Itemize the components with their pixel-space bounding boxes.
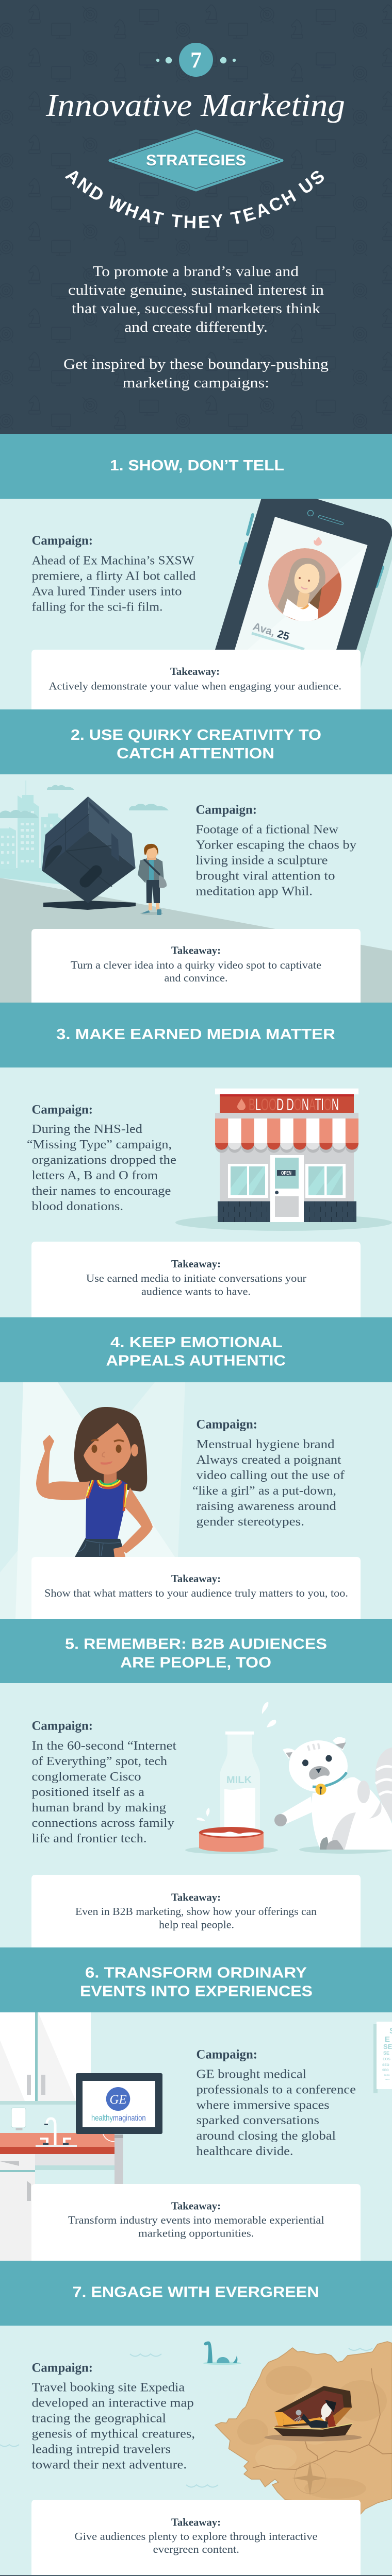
takeaway card: marketing opportunities. (138, 2227, 254, 2240)
panel: section 2 (0, 709, 392, 1003)
illustration: parchment map (215, 2342, 392, 2514)
intro text: marketing campaigns: (123, 375, 269, 391)
intro text: To promote a brand’s value and (93, 263, 299, 280)
campaign text (27, 1103, 176, 1213)
campaign text (32, 1719, 176, 1845)
takeaway card (31, 2184, 361, 2261)
heading 3: 3. MAKE EARNED MEDIA MATTER (56, 1026, 335, 1043)
campaign text: falling for the sci-fi film. (32, 600, 163, 614)
intro text: cultivate genuine, sustained interest in (68, 282, 324, 298)
campaign text: Always created a poignant (196, 1453, 341, 1467)
intro text: that value, successful marketers think (72, 300, 321, 317)
campaign text: “like a girl” as a put-down, (192, 1484, 336, 1498)
takeaway card (31, 1875, 361, 1947)
illustration: eye chart: SE (383, 2050, 389, 2056)
campaign text: around closing the global (196, 2129, 336, 2143)
campaign text: letters A, B and O from (32, 1168, 158, 1182)
takeaway card: help real people. (159, 1918, 234, 1930)
door: OPEN (281, 1171, 291, 1176)
campaign text: GE brought medical (196, 2067, 306, 2081)
badge: number 7 (156, 43, 236, 77)
awning (215, 1118, 358, 1153)
curved subtitle: AND WHAT THEY TEACH US (65, 171, 324, 229)
illustration: eye chart: SEO (382, 2069, 389, 2072)
profile name: Ava, 25 (251, 620, 291, 643)
illustration: medical exam room (0, 2012, 123, 2261)
top (86, 1480, 127, 1539)
campaign text: meditation app Whil. (196, 885, 313, 899)
heading 6: EVENTS INTO EXPERIENCES (80, 1983, 313, 1999)
illustration: milk bottle and bowl: MILK (226, 1775, 252, 1786)
takeaway card: Takeaway: (170, 665, 220, 677)
heading 7: 7. ENGAGE WITH EVERGREEN (73, 2284, 319, 2301)
panel: section 5 (0, 1619, 392, 1947)
campaign text: “Missing Type” campaign, (27, 1138, 172, 1151)
heading 3 (0, 1003, 392, 1067)
takeaway card: Use earned media to initiate conversations your (86, 1272, 306, 1284)
campaign text: premiere, a flirty AI bot called (32, 569, 196, 583)
campaign text: human brand by making (32, 1801, 166, 1815)
campaign text: tracing the geographical (32, 2412, 166, 2426)
campaign text: toward their next adventure. (32, 2458, 187, 2472)
arms (36, 1435, 90, 1500)
heading 5 (0, 1619, 392, 1683)
takeaway card: Even in B2B marketing, show how your offerings can (75, 1905, 317, 1918)
diamond banner: strategies: STRATEGIES (146, 152, 246, 169)
campaign text: Ahead of Ex Machina’s SXSW (32, 554, 194, 568)
vampire (328, 2414, 336, 2428)
campaign text: raising awareness around (196, 1499, 336, 1513)
campaign text: healthcare divide. (196, 2144, 293, 2158)
heading 4: 4. KEEP EMOTIONAL (110, 1334, 283, 1351)
illustration: eye chart: E (385, 2035, 390, 2044)
campaign text: where immersive spaces (196, 2098, 329, 2112)
waves (0, 2348, 372, 2487)
heading 5: 5. REMEMBER: B2B AUDIENCES (65, 1636, 327, 1652)
heading 2 (0, 709, 392, 774)
takeaway card: and convince. (164, 972, 228, 984)
campaign text: Ava lured Tinder users into (32, 585, 182, 599)
campaign text: Footage of a fictional New (196, 823, 338, 837)
panel: section 7 (0, 2261, 392, 2575)
campaign text: video calling out the use of (196, 1468, 345, 1482)
campaign text: Campaign: (196, 1418, 257, 1432)
campaign text (32, 534, 196, 614)
campaign text: conglomerate Cisco (32, 1770, 141, 1784)
sign text: BLOOD DONATION (249, 1095, 339, 1114)
intro text: and create differently. (124, 319, 268, 335)
campaign text: genesis of mythical creatures, (32, 2427, 195, 2441)
panel: section 3 (0, 1003, 392, 1317)
windows (228, 1164, 346, 1198)
takeaway card (31, 1557, 361, 1619)
takeaway card: Takeaway: (171, 944, 221, 957)
campaign text: gender stereotypes. (196, 1515, 304, 1529)
takeaway card: Takeaway: (171, 2199, 221, 2212)
heading 6 (0, 1947, 392, 2012)
illustration: eye chart (373, 2022, 392, 2093)
campaign text (32, 2361, 195, 2472)
takeaway card: Takeaway: (171, 2516, 221, 2528)
campaign text: Campaign: (32, 1719, 93, 1733)
diamond banner: strategies (110, 131, 282, 190)
takeaway card: Actively demonstrate your value when engaging your audience. (48, 680, 341, 692)
takeaway card (31, 650, 361, 709)
campaign text: life and frontier tech. (32, 1832, 146, 1845)
badge: number 7: 7 (190, 47, 202, 73)
illustration: monitor with GE logo: healthymagination (91, 2114, 146, 2123)
door (270, 1155, 304, 1222)
illustration: eye chart: EOS (383, 2058, 390, 2061)
heading 1 (0, 434, 392, 499)
heading 2: CATCH ATTENTION (117, 745, 274, 762)
takeaway card: Turn a clever idea into a quirky video spot to captivate (71, 959, 321, 971)
campaign text: Campaign: (196, 803, 257, 817)
illustration: monitor with GE logo: GE (109, 2093, 127, 2107)
campaign text: their names to encourage (32, 1184, 171, 1198)
takeaway card: Give audiences plenty to explore through interactive (74, 2530, 318, 2543)
campaign text: In the 60-second “Internet (32, 1739, 176, 1753)
campaign text: brought viral attention to (196, 869, 335, 883)
diamond banner: strategies: STRATEGIES (146, 153, 246, 170)
takeaway card (31, 1242, 361, 1317)
campaign text (196, 803, 357, 899)
heading 1: 1. SHOW, DON’T TELL (110, 457, 284, 474)
illustration: eye chart: SE (383, 2043, 392, 2050)
panel: section 6 (0, 1947, 392, 2261)
campaign text (196, 2048, 356, 2158)
campaign text: Campaign: (32, 2361, 93, 2375)
campaign text: Travel booking site Expedia (32, 2381, 185, 2395)
takeaway card: Takeaway: (171, 1258, 221, 1270)
campaign text: During the NHS-led (32, 1122, 142, 1136)
campaign text: living inside a sculpture (196, 854, 328, 868)
heading 2: 2. USE QUIRKY CREATIVITY TO (71, 727, 321, 743)
illustration: white cat (274, 1737, 392, 1854)
title script: Innovative Marketing (45, 88, 345, 123)
illustration: woman flexing (36, 1407, 153, 1557)
heading 4: APPEALS AUTHENTIC (106, 1353, 286, 1369)
avatar (268, 548, 341, 621)
campaign text: leading intrepid travelers (32, 2443, 171, 2456)
campaign text: organizations dropped the (32, 1153, 176, 1167)
icon: blood drop (237, 1098, 246, 1110)
campaign text: Campaign: (32, 534, 93, 548)
campaign text: blood donations. (32, 1199, 123, 1213)
illustration: milk bottle and bowl (185, 1702, 278, 1854)
campaign text (192, 1418, 345, 1529)
campaign text: Menstrual hygiene brand (196, 1437, 334, 1451)
takeaway card: Takeaway: (171, 1572, 221, 1585)
ground (0, 878, 392, 1003)
panel: section 4 (0, 1317, 392, 1619)
campaign text: positioned itself as a (32, 1785, 144, 1799)
intro text: Get inspired by these boundary-pushing (63, 356, 329, 372)
heading 5: ARE PEOPLE, TOO (120, 1654, 271, 1671)
campaign text: Campaign: (196, 2048, 257, 2062)
heading 6: 6. TRANSFORM ORDINARY (85, 1964, 307, 1981)
takeaway card: evergreen content. (153, 2543, 239, 2555)
takeaway card: audience wants to have. (141, 1285, 251, 1297)
takeaway card (31, 2500, 361, 2575)
heading 4 (0, 1317, 392, 1382)
illustration: cube sculpture (42, 796, 136, 910)
header panel (45, 43, 345, 391)
spotlights (0, 1382, 206, 1619)
takeaway card: Transform industry events into memorable experiential (68, 2214, 324, 2226)
panel: section 1 (0, 434, 392, 709)
takeaway card (31, 929, 361, 1003)
heading 7 (0, 2261, 392, 2326)
takeaway card: Takeaway: (171, 1891, 221, 1903)
bricks (218, 1201, 356, 1222)
illustration: eye chart: SEO (382, 2063, 389, 2067)
illustration: person (138, 844, 167, 915)
takeaway card: Show that what matters to your audience truly matters to you, too. (44, 1587, 348, 1599)
campaign text: sparked conversations (196, 2113, 319, 2127)
campaign text: of Everything” spot, tech (32, 1754, 167, 1768)
campaign text: connections across family (32, 1816, 175, 1830)
campaign text: Campaign: (32, 1103, 93, 1117)
illustration: city skyline (0, 781, 169, 886)
illustration: eye chart: SEOS (385, 2078, 389, 2080)
coffin base (273, 2424, 353, 2430)
illustration: blood donation storefront (175, 1089, 392, 1231)
campaign text: Yorker escaping the chaos by (196, 838, 357, 852)
intro text (63, 263, 329, 391)
illustration: eye chart: SOEO (384, 2074, 390, 2076)
illustration: monitor with GE logo (76, 2073, 162, 2134)
campaign text: developed an interactive map (32, 2396, 194, 2410)
icon: sea monster (203, 2342, 241, 2365)
campaign text: professionals to a conference (196, 2082, 356, 2096)
face (84, 1423, 131, 1475)
illustration: phone (215, 499, 392, 668)
illustration: vampire in coffin (264, 2386, 362, 2441)
